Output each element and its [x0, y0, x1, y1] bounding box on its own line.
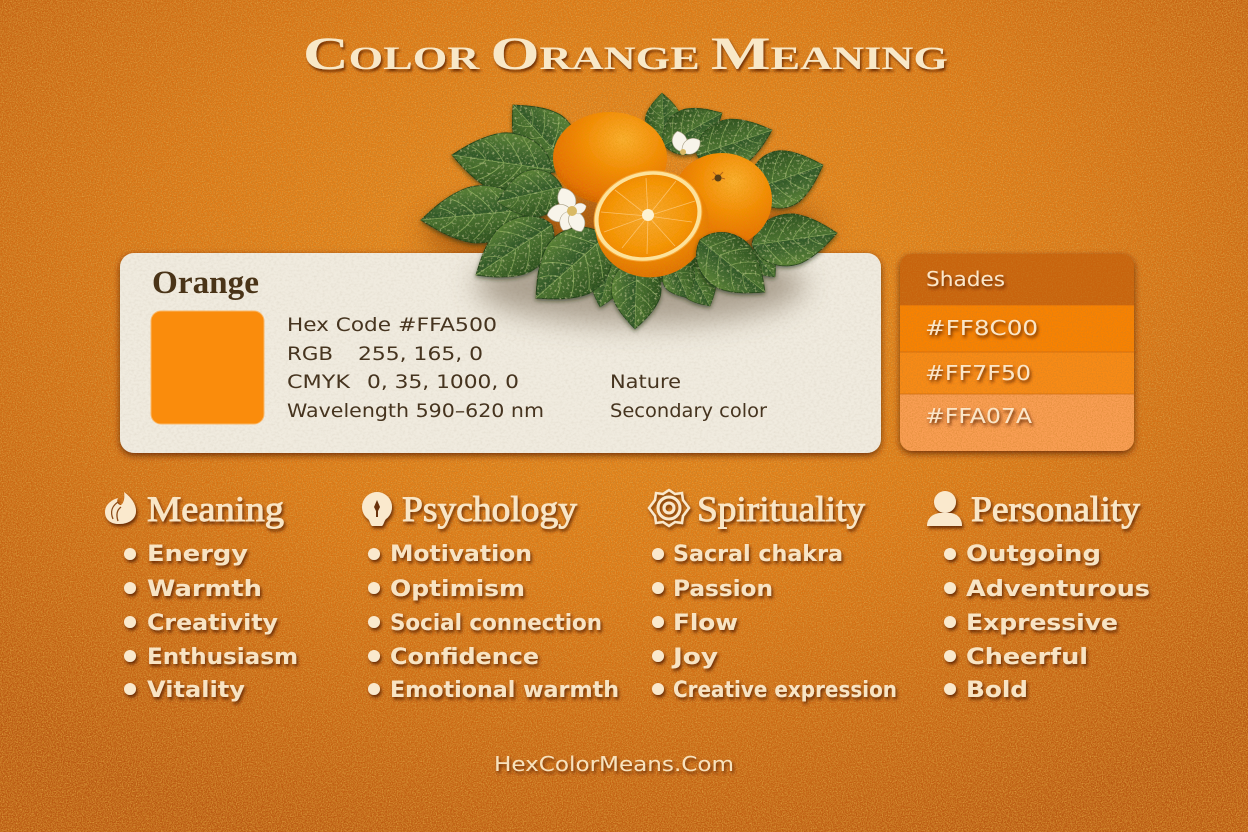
heading: meaning: Meaning [147, 489, 284, 529]
color notes: Nature [610, 371, 681, 393]
color values: Hex Code [287, 314, 391, 336]
icon: person [927, 491, 962, 526]
shades texture [900, 254, 1134, 451]
fruit shadow on card [475, 245, 805, 325]
column: personality [927, 489, 1150, 703]
column: meaning [105, 489, 298, 703]
leaves [418, 85, 841, 330]
list: personality: Adventurous [966, 577, 1150, 602]
color values [287, 314, 544, 422]
list: spirituality: Passion [673, 577, 773, 602]
icon: flame [105, 492, 136, 524]
heading: psychology: Psychology [402, 489, 577, 529]
shade rows [900, 254, 1134, 451]
card surface [120, 253, 881, 453]
flower: right [671, 130, 704, 158]
list: meaning: Creativity [147, 611, 278, 636]
shade labels: Shades [926, 267, 1005, 291]
list: meaning: Enthusiasm [147, 645, 298, 670]
list: psychology: Optimism [390, 577, 525, 602]
list: meaning: Vitality [147, 678, 245, 703]
list: psychology: Emotional warmth [390, 678, 619, 703]
color values: CMYK [287, 371, 351, 393]
color values: #FFA500 [398, 314, 497, 336]
heading: personality: Personality [971, 489, 1140, 529]
shade labels: #FF8C00 [925, 316, 1038, 340]
list: psychology [368, 542, 619, 703]
icon: light bulb [362, 492, 392, 526]
card heading: Orange [152, 265, 259, 301]
color values: Wavelength 590–620 nm [287, 400, 544, 422]
shade labels [925, 267, 1038, 428]
color notes: Secondary color [610, 400, 767, 422]
list: spirituality: Creative expression [673, 678, 897, 703]
list: meaning: Warmth [147, 577, 262, 602]
flower: left [546, 185, 588, 235]
column: spirituality [649, 489, 897, 703]
list: spirituality: Joy [671, 645, 718, 670]
list: meaning: Energy [147, 542, 248, 567]
illustration: oranges and leaves [418, 85, 841, 330]
list: personality: Outgoing [966, 542, 1101, 567]
color notes [610, 371, 767, 422]
shade labels: #FF7F50 [925, 361, 1031, 385]
orange: cut half [583, 158, 721, 290]
column: psychology [362, 489, 619, 703]
panel: orange color card [120, 245, 881, 453]
color values: 255, 165, 0 [358, 343, 483, 365]
card paper texture [120, 253, 881, 453]
title: C OLOR O RANGE M EANING [303, 28, 948, 80]
list: personality: Expressive [966, 611, 1118, 636]
color swatch [151, 311, 264, 424]
footer website: HexColorMeans.Com [494, 752, 734, 776]
heading: spirituality: Spirituality [697, 489, 865, 529]
list: personality [944, 542, 1150, 703]
list: psychology: Confidence [390, 645, 539, 670]
shadow behind fruit on background [425, 192, 825, 272]
list: personality: Cheerful [966, 645, 1088, 670]
orange: right whole [672, 153, 772, 247]
shade labels: #FFA07A [925, 404, 1032, 428]
orange: top whole [553, 112, 667, 204]
list: spirituality [652, 542, 897, 703]
foreground leaf [683, 219, 782, 313]
list: psychology: Motivation [390, 542, 532, 567]
list: meaning [124, 542, 298, 703]
color values: RGB [287, 343, 333, 365]
icon: chakra [649, 490, 689, 526]
list: spirituality: Flow [673, 611, 738, 636]
color values: 0, 35, 1000, 0 [367, 371, 519, 393]
list: spirituality: Sacral chakra [673, 542, 843, 567]
list: personality: Bold [966, 678, 1028, 703]
list: psychology: Social connection [390, 611, 602, 636]
panel: shades [900, 254, 1134, 451]
